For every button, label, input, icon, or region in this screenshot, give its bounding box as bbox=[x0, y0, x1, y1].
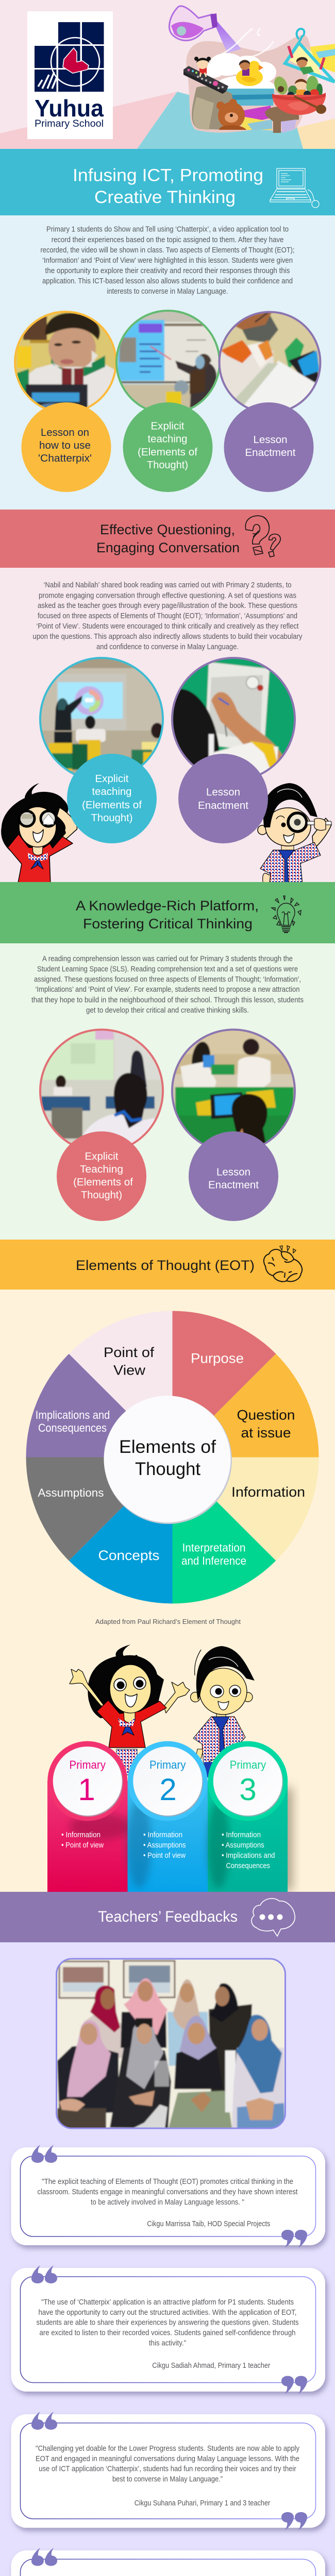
wheel segment: Point of View: View bbox=[113, 1363, 146, 1378]
illustration: boy with magnifying glass bbox=[258, 783, 331, 913]
icon: question marks bbox=[245, 516, 280, 557]
label: explicit teaching: (Elements of bbox=[82, 799, 142, 811]
heading: Elements of Thought (EOT) bbox=[76, 1258, 255, 1273]
card: Primary 1 bbox=[47, 1741, 131, 1892]
panel: Knowledge-Rich Platform section bbox=[0, 882, 335, 1240]
quote text bbox=[37, 2178, 298, 2228]
quote text: to be actively involved in Malay Language lessons. " bbox=[91, 2198, 244, 2207]
text block: reading comprehension description: Student Learning Space (SLS). Reading comprehension text and a set of questions were bbox=[37, 965, 298, 974]
wheel segment: Question at issue: Question bbox=[237, 1408, 295, 1423]
card: Primary 3: • Implications and bbox=[222, 1852, 275, 1860]
label: lesson enactment: Lesson bbox=[216, 1166, 250, 1178]
wheel centre: Elements of Thought: Elements of bbox=[119, 1437, 216, 1457]
heading: Effective Questioning, bbox=[100, 522, 235, 537]
label: lesson on Chatterpix: Lesson on bbox=[41, 427, 89, 438]
wheel segment: Point of View bbox=[69, 1311, 172, 1457]
icon: opening quote bbox=[31, 2412, 57, 2430]
heading bbox=[73, 166, 263, 207]
icon: opening quote bbox=[31, 2145, 57, 2163]
text block: reading comprehension description: get to develop their critical and creative thinking skills. bbox=[86, 1006, 249, 1014]
quote card 2 bbox=[11, 2265, 325, 2394]
quote text: students are able to share their experiences by answering the questions given. Students bbox=[36, 2319, 299, 2327]
wheel segment: Interpretation and Inference: Interpretation bbox=[182, 1541, 245, 1554]
label: lesson enactment: Lesson bbox=[206, 786, 240, 798]
photo: students watching projected text bbox=[39, 1028, 164, 1154]
label: explicit teaching bbox=[123, 402, 212, 492]
label: explicit teaching: Teaching bbox=[80, 1163, 123, 1175]
card: Primary 3: 3 bbox=[239, 1772, 257, 1807]
wheel segment: Implications and Consequences: Consequences bbox=[38, 1421, 107, 1434]
logo: Yuhua Primary School: Primary School bbox=[35, 118, 104, 129]
text block: lesson description: application. This ICT-based lesson also allows students to build their confidence and bbox=[42, 277, 293, 285]
heading: Infusing ICT, Promoting bbox=[73, 166, 263, 185]
card: Primary 2: 2 bbox=[159, 1772, 177, 1807]
text block: reading comprehension description: that they hope to build in the neighbourhood of their school. Through this lesson, students bbox=[31, 996, 304, 1005]
card: Primary 3: • Information bbox=[222, 1831, 261, 1839]
text block: reading comprehension description bbox=[31, 955, 304, 1014]
wheel segment: Question at issue bbox=[172, 1354, 319, 1457]
wheel segment: Implications and Consequences bbox=[26, 1354, 172, 1457]
label: explicit teaching: (Elements of bbox=[138, 446, 197, 458]
label: explicit teaching: Explicit bbox=[95, 773, 129, 785]
label: lesson enactment bbox=[189, 1131, 278, 1221]
text block: lesson description: the opportunity to explore their creativity and record their responses through this bbox=[45, 267, 290, 275]
card: Primary 1: 1 bbox=[78, 1772, 95, 1807]
quote text: Cikgu Marrissa Taib, HOD Special Projects bbox=[147, 2220, 270, 2228]
card: Primary 1: • Information bbox=[61, 1831, 100, 1839]
heading: A Knowledge-Rich Platform, bbox=[76, 898, 259, 913]
icon: opening quote bbox=[31, 2265, 57, 2283]
wheel segment: Assumptions: Assumptions bbox=[38, 1486, 104, 1499]
label: explicit teaching bbox=[57, 1131, 146, 1221]
quote text: "Challenging yet doable for the Lower Progress students. Students are now able to apply bbox=[36, 2445, 300, 2453]
text block: shared book reading description: asked as the teacher goes through every page/illustration of the book. These questions bbox=[38, 602, 297, 610]
icon: laptop bbox=[270, 168, 319, 208]
card: Primary 3: Primary bbox=[230, 1758, 266, 1771]
logo: Yuhua Primary School bbox=[27, 11, 113, 139]
label: explicit teaching: Thought) bbox=[81, 1189, 122, 1201]
label: lesson enactment: Enactment bbox=[198, 800, 248, 811]
text block: shared book reading description bbox=[33, 581, 303, 651]
card: Primary 2 bbox=[127, 1741, 208, 1892]
text block: shared book reading description: and confidence to converse in Malay Language. bbox=[96, 643, 239, 651]
photo: students using devices at tables bbox=[171, 1028, 296, 1145]
illustration: creative thinking scene bbox=[169, 6, 335, 133]
text block: reading comprehension description: ‘Implications’ and ‘Point of View’. For example, students need to propose a new attraction bbox=[35, 986, 300, 994]
quote text bbox=[36, 2445, 300, 2507]
card: Primary 3 bbox=[207, 1741, 288, 1892]
icon: closing quote bbox=[281, 2376, 307, 2394]
heading: Creative Thinking bbox=[94, 188, 236, 207]
quote text: Cikgu Sadiah Ahmad, Primary 1 teacher bbox=[152, 2362, 270, 2370]
logo: Yuhua Primary School: Yuhua bbox=[35, 95, 104, 122]
label: lesson on Chatterpix: how to use bbox=[39, 439, 91, 451]
wheel segment: Concepts: Concepts bbox=[98, 1548, 160, 1563]
wheel segment: Concepts bbox=[69, 1457, 172, 1603]
quote text: classroom. Students engage in meaningful conversations and they have shown interest bbox=[37, 2188, 298, 2196]
card: Primary 1: • Point of view bbox=[61, 1841, 104, 1850]
text block: lesson description bbox=[40, 226, 295, 296]
illustration: waving girl bbox=[70, 1645, 190, 1775]
wheel segment: Assumptions bbox=[26, 1457, 172, 1561]
label: explicit teaching: (Elements of bbox=[73, 1176, 133, 1188]
quote text: "The use of ‘Chatterpix’ application is an attractive platform for P1 students. Students bbox=[41, 2298, 294, 2307]
quote text: best to converse in Malay Language.” bbox=[112, 2476, 223, 2484]
quote text: have the opportunity to carry out the structured activities. With the application of EOT, bbox=[38, 2309, 297, 2317]
text block: shared book reading description: focused on three aspects of Elements of Thought (EOT); ‘Information’, ‘Assumptions’ and bbox=[38, 612, 297, 620]
label: lesson on Chatterpix: 'Chatterpix' bbox=[38, 452, 92, 464]
icon: opening quote bbox=[31, 2548, 57, 2566]
label: explicit teaching: Explicit bbox=[85, 1150, 119, 1162]
wheel segment: Information bbox=[172, 1457, 319, 1561]
panel: hero banner bbox=[0, 0, 335, 149]
heading: Engaging Conversation bbox=[96, 540, 240, 555]
wheel segment: Interpretation and Inference: and Inference bbox=[181, 1554, 246, 1567]
photo: child colouring worksheet bbox=[171, 657, 296, 782]
quote text: this activity.” bbox=[149, 2340, 186, 2348]
quote text: EOT and engaged in meaningful conversations during Malay Language lessons. With the bbox=[36, 2455, 299, 2463]
illustration: girl with magnifying glasses bbox=[1, 783, 77, 903]
wheel segment: Purpose bbox=[172, 1311, 276, 1457]
quote card 1 bbox=[11, 2145, 325, 2248]
photo: group of teachers bbox=[56, 1958, 286, 2131]
label: lesson enactment: Enactment bbox=[245, 447, 296, 459]
text block: shared book reading description: ‘Point of View’. Students were encouraged to think critically and creatively as they reflect bbox=[36, 622, 299, 631]
panel: Infusing ICT section bbox=[0, 149, 335, 510]
label: explicit teaching bbox=[67, 754, 157, 843]
quote text: "The explicit teaching of Elements of Thought (EOT) promotes critical thinking in the bbox=[42, 2178, 293, 2186]
icon: speech bubble bbox=[252, 1899, 295, 1936]
label: explicit teaching: Explicit bbox=[150, 420, 185, 432]
icon: brain bbox=[264, 1246, 302, 1282]
quote text: Cikgu Suhana Puhari, Primary 1 and 3 teacher bbox=[135, 2499, 270, 2507]
icon: closing quote bbox=[281, 2512, 307, 2530]
wheel centre: Elements of Thought bbox=[104, 1396, 232, 1524]
text block: lesson description: interests to converse in Malay Language. bbox=[107, 287, 228, 296]
label: explicit teaching: Thought) bbox=[147, 459, 188, 471]
label: explicit teaching: teaching bbox=[92, 786, 132, 798]
heading: Teachers’ Feedbacks bbox=[98, 1908, 238, 1925]
text block: shared book reading description: upon the questions. This approach also indirectly allows students to build their vocabulary bbox=[33, 633, 303, 641]
card: Primary 2: Primary bbox=[149, 1758, 186, 1771]
wheel segment: Interpretation and Inference bbox=[172, 1457, 276, 1603]
wheel segment: Question at issue: at issue bbox=[241, 1425, 291, 1440]
chart: elements of thought wheel bbox=[26, 1311, 319, 1603]
wheel segment: Purpose: Purpose bbox=[191, 1351, 244, 1366]
text block: reading comprehension description: assigned. These questions focused on three aspects of Elements of Thought; ‘Information’, bbox=[34, 975, 301, 984]
wheel segment: Implications and Consequences: Implications and bbox=[36, 1409, 110, 1421]
icon: light bulb bbox=[272, 896, 301, 933]
label: lesson enactment bbox=[224, 402, 313, 492]
heading bbox=[96, 522, 240, 555]
text block: shared book reading description: ‘Nabil and Nabilah’ shared book reading was carried out with Primary 2 students, to bbox=[43, 581, 292, 589]
card: Primary 3: • Assumptions bbox=[222, 1841, 264, 1850]
card: Primary 2: • Assumptions bbox=[143, 1841, 186, 1850]
heading bbox=[76, 898, 259, 931]
photo: student writing bbox=[219, 311, 322, 414]
caption: source credit: Adapted from Paul Richard’s Element of Thought bbox=[95, 1618, 241, 1625]
label: lesson on Chatterpix bbox=[22, 402, 111, 492]
text block: lesson description: record their experiences based on the topic assigned to them. After they have bbox=[52, 236, 283, 244]
quote card 3 bbox=[11, 2412, 325, 2530]
quote text bbox=[36, 2298, 299, 2370]
photo: teacher with projected wheel bbox=[39, 657, 164, 782]
photo: boy with tablet bbox=[14, 311, 117, 417]
label: lesson enactment: Enactment bbox=[208, 1179, 259, 1191]
illustration: smiling boy bbox=[191, 1646, 255, 1777]
label: lesson enactment: Lesson bbox=[254, 434, 288, 446]
card: Primary 3: Consequences bbox=[226, 1862, 270, 1870]
text block: reading comprehension description: A reading comprehension lesson was carried out for Primary 3 students through the bbox=[42, 955, 293, 963]
icon: closing quote bbox=[281, 2230, 307, 2248]
wheel centre: Elements of Thought: Thought bbox=[135, 1459, 200, 1479]
card: Primary 1: Primary bbox=[69, 1758, 106, 1771]
photo: teacher at whiteboard bbox=[115, 310, 221, 415]
text block: shared book reading description: promote engaging conversation through effective questioning. A set of questions was bbox=[39, 591, 296, 600]
quote card 4 bbox=[11, 2548, 325, 2576]
panel: Teachers' Feedbacks section bbox=[0, 1892, 335, 2576]
wheel segment: Point of View: Point of bbox=[104, 1345, 155, 1360]
heading: Fostering Critical Thinking bbox=[83, 916, 253, 931]
quote text: use of ICT application ‘Chatterpix’, students had fun recording their voices and try their bbox=[39, 2465, 296, 2473]
quote text: are excited to listen to their recorded voices. Students gained self-confidence through bbox=[39, 2329, 296, 2337]
panel: Effective Questioning section bbox=[0, 510, 335, 913]
label: explicit teaching: Thought) bbox=[91, 812, 133, 824]
panel: Elements of Thought section bbox=[0, 1240, 335, 1892]
label: lesson enactment bbox=[178, 754, 268, 843]
card: Primary 2: • Information bbox=[143, 1831, 182, 1839]
label: explicit teaching: teaching bbox=[147, 433, 188, 445]
wheel segment: Information: Information bbox=[231, 1484, 305, 1500]
text block: lesson description: recorded, the video will be shown in class. Two aspects of Elements of Thought (EOT); bbox=[40, 246, 295, 255]
card: Primary 2: • Point of view bbox=[143, 1852, 186, 1860]
text block: lesson description: Primary 1 students do Show and Tell using ‘Chatterpix’, a video application tool to bbox=[46, 226, 289, 234]
text block: lesson description: ‘Information’ and ‘Point of View’ were highlighted in this lesson. Students were given bbox=[42, 257, 293, 265]
